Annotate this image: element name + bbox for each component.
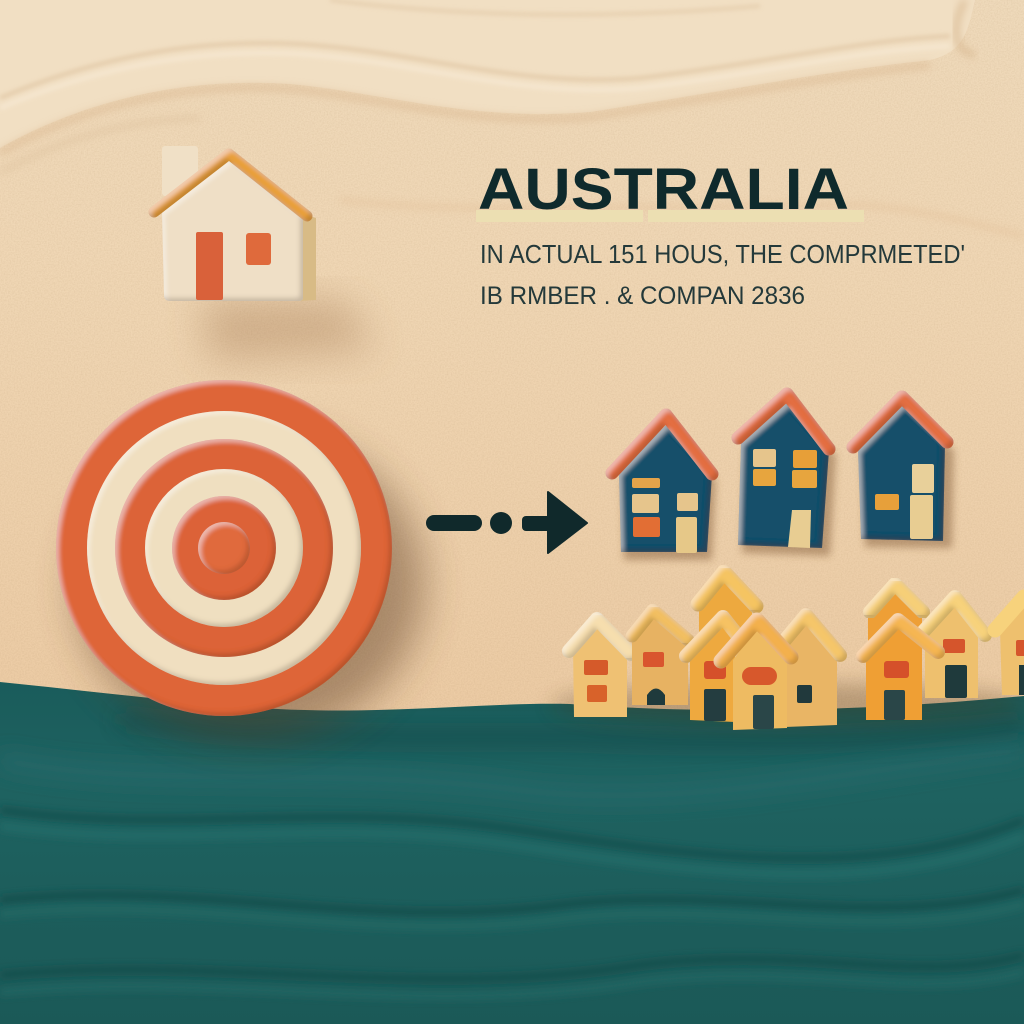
target concentric rings: [56, 380, 425, 740]
small house D: [686, 617, 738, 722]
navy house 2: [738, 394, 836, 556]
bullseye: [198, 522, 250, 574]
house door: [196, 232, 223, 300]
title: AUSTRALIA: [478, 157, 849, 222]
small house back left: [698, 572, 756, 650]
navy house 1: [612, 415, 716, 560]
sand wave relief at top: [0, 0, 1024, 236]
small house I: [923, 597, 985, 698]
small house A: [569, 619, 631, 717]
navy house 2 roof: [738, 394, 829, 449]
house side wall: [298, 212, 316, 301]
subtitle text: IB RMBER . & COMPAN 2836: [480, 282, 805, 310]
small house F: [785, 615, 840, 727]
subtitle text: IN ACTUAL 151 HOUS, THE COMPRMETED': [480, 239, 965, 269]
navy house 1 wall: [619, 425, 712, 552]
row of small yellow houses: [550, 572, 1024, 730]
inner orange ring: [172, 496, 276, 600]
small house H: [863, 620, 938, 720]
house window: [246, 233, 271, 265]
title highlight underline: [476, 210, 864, 222]
navy house 1 windows and door: [632, 478, 698, 553]
navy house 3 roof: [853, 397, 947, 447]
navy house 2 wall: [738, 403, 829, 548]
navy house 3: [853, 397, 954, 548]
navy house 3 windows and door: [875, 464, 934, 539]
orange ring: [115, 439, 333, 657]
icon: large single house: [154, 146, 375, 360]
cream ring: [87, 411, 361, 685]
green wave ground: [0, 682, 1024, 1024]
navy house 3 wall: [858, 405, 945, 541]
navy house 1 roof: [612, 415, 712, 474]
small house back right: [868, 584, 923, 650]
subtitle text: [480, 239, 965, 310]
small house E: [721, 620, 791, 730]
outer orange ring: [56, 380, 392, 716]
small house J at right edge: [995, 597, 1024, 695]
navy house 2 windows and door: [753, 449, 817, 548]
house roof: [154, 154, 307, 216]
small house B: [632, 610, 688, 705]
house front wall: [162, 160, 303, 301]
dashed arrow: [426, 492, 587, 553]
inner cream ring: [145, 469, 303, 627]
chimney: [162, 146, 198, 196]
